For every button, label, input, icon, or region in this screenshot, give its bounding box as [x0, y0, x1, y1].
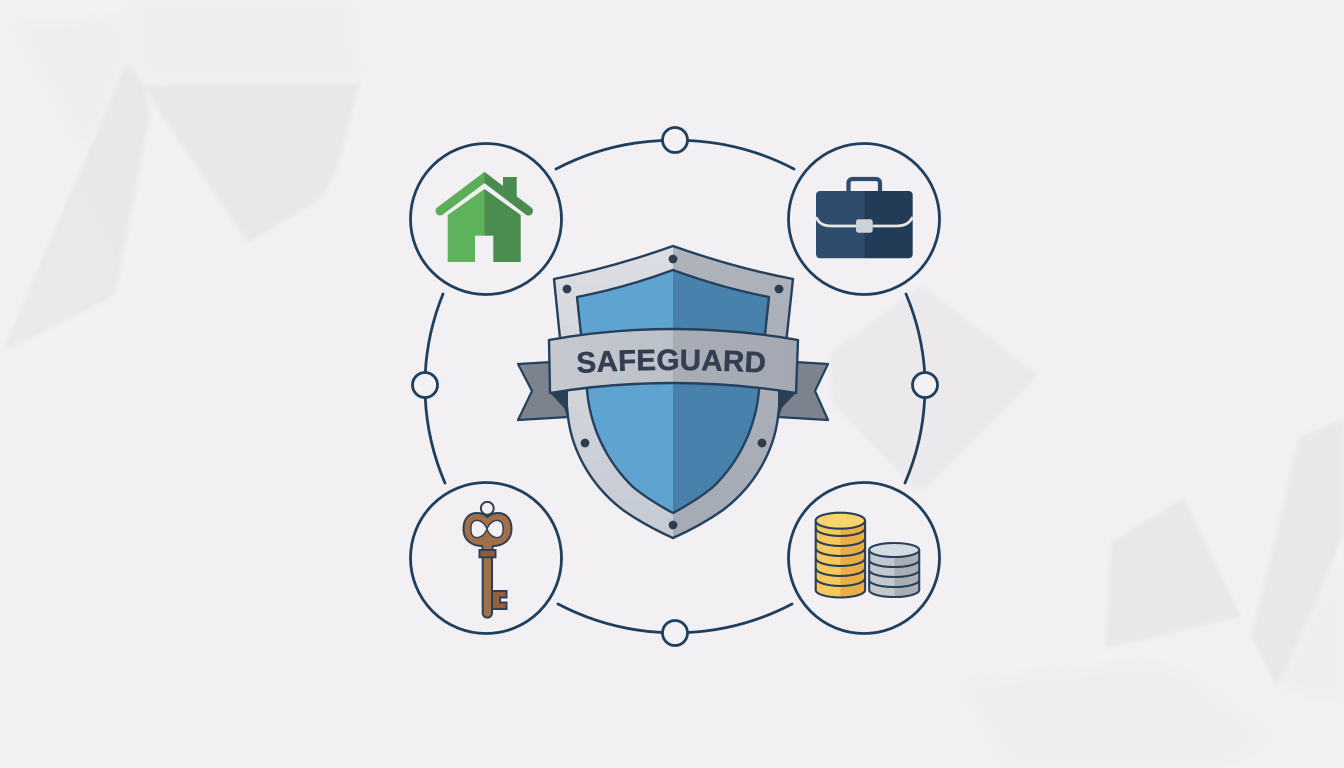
- icon: silver coin stack: [869, 543, 919, 600]
- ribbon tail: right: [778, 362, 828, 420]
- panel: coins: [788, 482, 940, 634]
- banner: [549, 329, 798, 393]
- panel: briefcase: [788, 144, 940, 294]
- ring arc: bottom right: [688, 604, 792, 632]
- ribbon fold: right: [778, 390, 796, 412]
- icon: key: [464, 502, 512, 618]
- ring node: left: [412, 372, 438, 398]
- icon: gold coin stack: [815, 513, 866, 600]
- ring arc: right lower: [905, 398, 925, 483]
- ring arc: left upper: [425, 294, 443, 372]
- ring arc: top left: [556, 140, 662, 169]
- icon: briefcase: [816, 179, 913, 258]
- ring arc: right upper: [906, 294, 925, 372]
- ring node: top: [662, 128, 688, 152]
- ring node: bottom: [662, 620, 688, 646]
- safeguard infographic: [62, 68, 1341, 679]
- ring arc: top right: [688, 140, 794, 169]
- panel: key: [410, 482, 562, 634]
- banner text: SAFEGUARD: [577, 349, 765, 373]
- shield rivets: [563, 255, 783, 529]
- panel: home: [410, 144, 562, 294]
- ring arc: left lower: [425, 398, 445, 483]
- icon: house: [440, 177, 528, 263]
- ring arc: bottom left: [558, 604, 662, 632]
- ring node: right: [912, 372, 938, 398]
- shield rim: [554, 246, 793, 538]
- connecting ring: [425, 140, 925, 632]
- shield emblem: [516, 244, 830, 540]
- ribbon fold: left: [550, 390, 568, 412]
- ribbon tail: left: [518, 362, 568, 420]
- shield blue face: [577, 270, 769, 513]
